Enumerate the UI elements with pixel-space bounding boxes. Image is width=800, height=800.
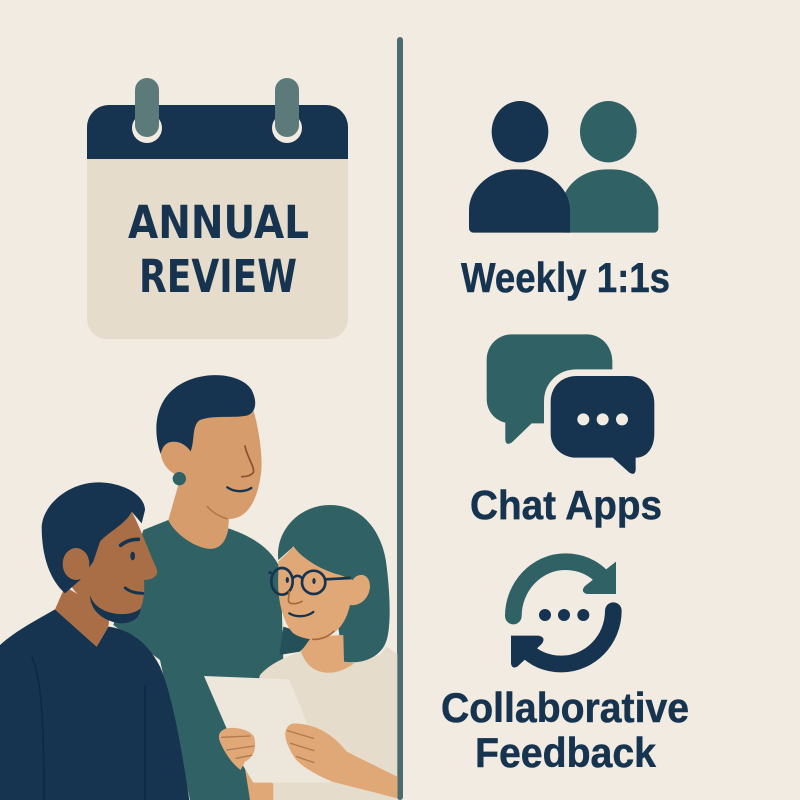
label: Chat Apps: Chat Apps (470, 482, 662, 528)
calendar title: REVIEW (139, 250, 297, 303)
icon: two people (weekly 1:1s) (469, 101, 658, 233)
label: Weekly 1:1s: Weekly 1:1s (461, 254, 670, 301)
person with glasses (247, 505, 397, 800)
calendar title: ANNUAL (128, 196, 309, 249)
illustration: three colleagues reviewing a document (0, 375, 397, 800)
label: Collaborative Feedback: Feedback (475, 729, 657, 776)
icon: chat bubbles (487, 334, 654, 474)
label: Collaborative Feedback: Collaborative (441, 684, 689, 731)
seated person in navy (0, 482, 189, 800)
standing person (113, 375, 283, 800)
icon: feedback loop (511, 562, 616, 667)
calendar title (128, 196, 309, 303)
icon: annual review calendar (87, 78, 348, 339)
document sheet with hands (204, 676, 397, 800)
label: Collaborative Feedback (441, 684, 689, 776)
